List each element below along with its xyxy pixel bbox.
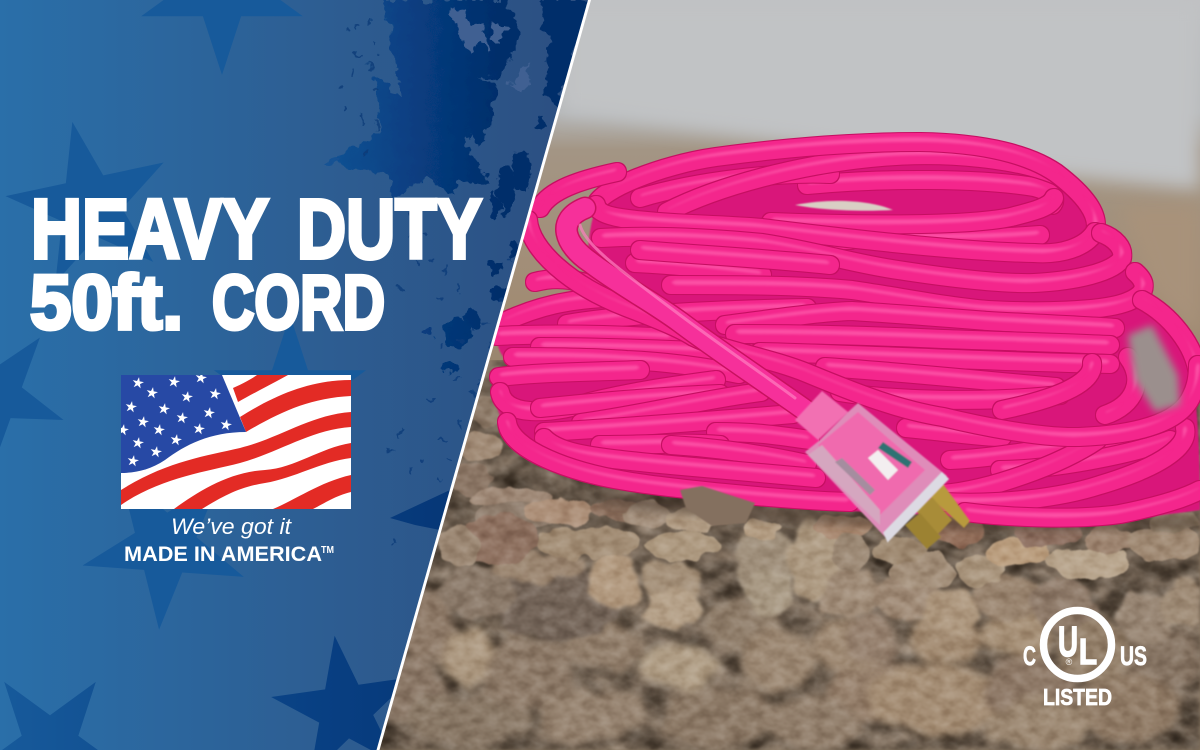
pink extension cord coil <box>495 139 1200 530</box>
heading word 50ft.: 50ft. <box>30 260 183 346</box>
plug: translucent body with brass prongs <box>795 391 970 549</box>
brass prongs <box>905 484 970 549</box>
foreground stone on the cord <box>680 486 755 526</box>
heading: HEAVY DUTY 50ft. CORD <box>30 182 482 346</box>
registered mark: ® <box>1066 657 1073 667</box>
lower-right star fragment <box>390 490 450 530</box>
left blue panel with distressed stars <box>0 0 600 750</box>
tagline: We've got it MADE IN AMERICA <box>124 514 334 566</box>
flag white field <box>121 375 351 509</box>
distressed star pattern <box>0 0 450 750</box>
contact shadow under cord <box>600 490 1200 530</box>
red stripes <box>121 375 351 509</box>
UL letters: U <box>1058 618 1078 666</box>
lighter grunge inside the dark mass <box>450 8 530 95</box>
tagline bold line: MADE IN AMERICA <box>124 543 322 566</box>
clear housing <box>795 391 947 540</box>
photo background: wall and ground <box>370 0 1200 750</box>
UL listed certification mark: L <box>1079 631 1097 672</box>
UL ring <box>1044 610 1112 678</box>
gravel texture overlay <box>370 400 1200 750</box>
US: US <box>1120 641 1147 671</box>
diagonal white divider <box>376 0 591 750</box>
icon: waving American flag <box>117 371 351 509</box>
gap in the top coil <box>795 201 893 211</box>
stars on canton <box>117 371 233 467</box>
gravel stones <box>370 360 1200 750</box>
heading word HEAVY: HEAVY <box>31 182 269 276</box>
tagline italic line: We’ve got it <box>171 514 292 539</box>
photo: pink cord on gravel <box>370 0 1200 750</box>
trademark: TM <box>321 545 334 556</box>
grunge specks <box>340 18 513 544</box>
LISTED: LISTED <box>1043 684 1112 710</box>
C: C <box>1023 641 1036 671</box>
blue canton <box>121 375 246 473</box>
heading word DUTY: DUTY <box>297 182 482 276</box>
grey receptacle end behind coil <box>1128 325 1180 412</box>
UL listed certification mark <box>1023 610 1147 710</box>
upper-right distressed mass <box>325 0 590 373</box>
heading word CORD: CORD <box>212 260 385 346</box>
panel gradient background <box>0 0 600 750</box>
main lead cord to plug <box>566 208 812 415</box>
grunge islands <box>498 167 515 213</box>
cord shadow mass <box>495 139 1200 522</box>
coil strands <box>497 142 1200 518</box>
